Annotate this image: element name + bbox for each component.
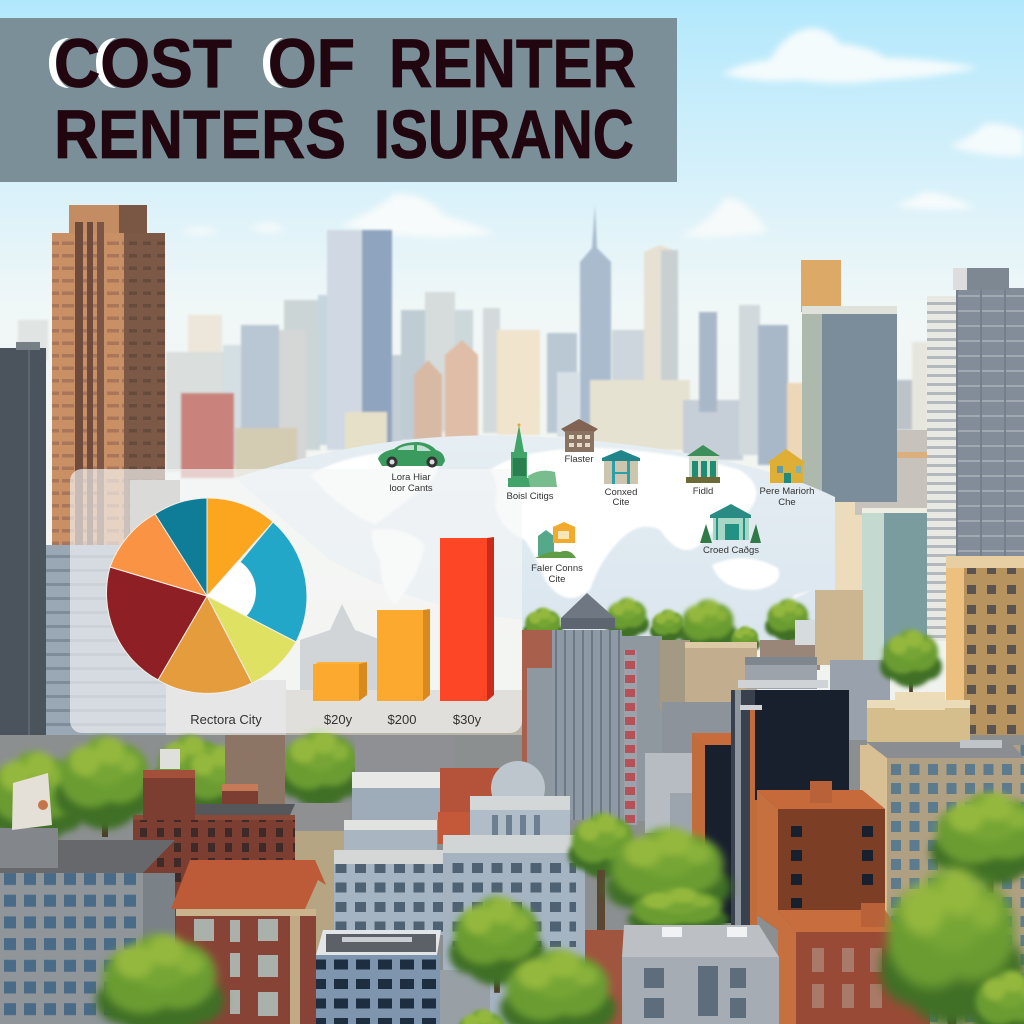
right-side towers [801,260,1024,745]
back tree cluster [0,729,362,852]
distant skyline [18,205,928,478]
label: pie chart: Rectora City [190,712,262,727]
brick block [133,749,295,1024]
pale roof block [622,925,779,1024]
small background trees [523,598,811,658]
black tower [692,657,849,928]
map continents [310,448,812,605]
grey left block [0,773,175,1024]
tan mid-rise [860,740,1024,1024]
icon: teal temple [700,504,761,543]
icon: green house [686,445,720,483]
world map backdrop [235,435,835,650]
map icons and labels [378,419,814,585]
label: green house: Fidld [693,486,713,497]
label: yellow house: Pere Mariorh [760,486,814,497]
label: teal temple: Croed Caðgs [703,545,759,556]
label: bar three: $30y [453,712,482,727]
red roof building [171,860,326,1024]
icon: green tower [508,424,557,487]
panel: chart card [70,469,522,733]
white-grey stepped block [334,772,444,935]
title banner: ISURANC [374,96,634,173]
city base fill [0,735,1024,1024]
icon: car [378,442,445,468]
label: teal hall second line: Cite [613,497,629,508]
bar chart [313,537,494,701]
icon: yellow house [767,449,806,483]
ghost city behind panel [46,480,526,740]
label: bar one: $20y [324,712,353,727]
midground buildings [522,590,1024,1024]
label: car: Lora Hiar [391,472,431,483]
title banner: OF [268,25,355,102]
dark-blue low block [316,930,441,1024]
brown high-rise tower [52,205,165,553]
icon: teal hall [602,450,640,484]
label: small houses: Faler Conns [531,563,583,574]
left dark tower [0,342,46,760]
label: small houses second line: Cite [549,574,565,585]
label: car second line: loor Cants [389,483,433,494]
red lower building [778,903,930,1024]
foreground trees [96,792,1024,1024]
pie chart [106,498,307,693]
label: tower: Boisl Citigs [506,491,554,502]
label: yellow house second line: Che [778,497,796,508]
label: bar two: $200 [388,712,416,727]
tall right-centre tree [568,813,638,884]
big centre tree [605,827,731,928]
title banner: RENTERS [54,96,346,173]
icon: small houses [535,522,576,558]
title banner: RENTER [389,25,636,102]
domed block [443,761,585,1024]
orange-brick building [757,781,885,930]
title banner [0,18,677,182]
clouds [180,28,1024,238]
title banner: COST [54,25,232,102]
tree right of towers [880,629,942,692]
foreground buildings and trees, left [0,729,1024,1024]
label: teal hall: Conxed [605,487,637,498]
icon: brown house [561,419,598,452]
label: brown house: Flaster [564,454,594,465]
